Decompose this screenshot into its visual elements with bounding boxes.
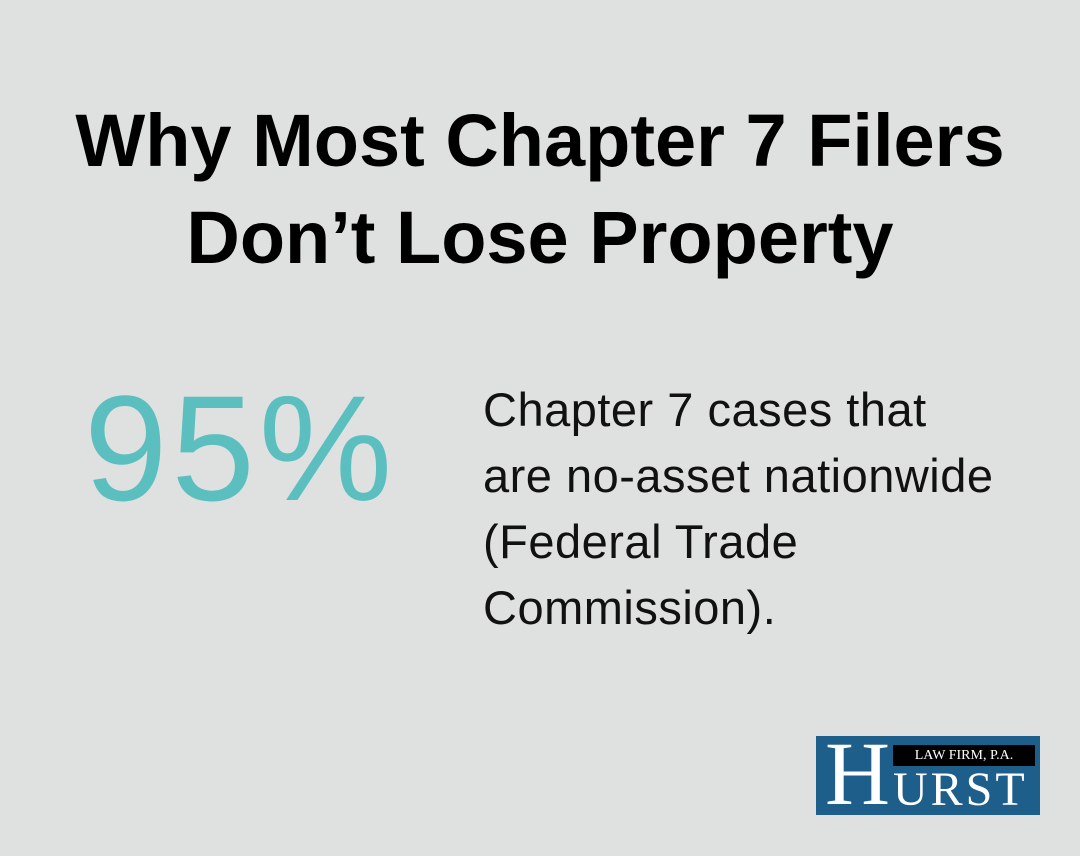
stat description: are no-asset nationwide [483,449,994,502]
logo: Hurst Law Firm: LAW FIRM, P.A. [915,748,1013,763]
title: Don’t Lose Property [186,196,894,279]
stat description [483,383,994,634]
logo: Hurst Law Firm: H [825,725,890,824]
stat description: Commission). [483,581,776,634]
logo: Hurst Law Firm [816,736,1040,815]
stat number: 95% [84,364,396,532]
title [75,99,1005,279]
title: Why Most Chapter 7 Filers [75,99,1005,182]
stat description: Chapter 7 cases that [483,383,927,436]
logo: Hurst Law Firm: URST [893,763,1028,816]
stat description: (Federal Trade [483,515,798,568]
